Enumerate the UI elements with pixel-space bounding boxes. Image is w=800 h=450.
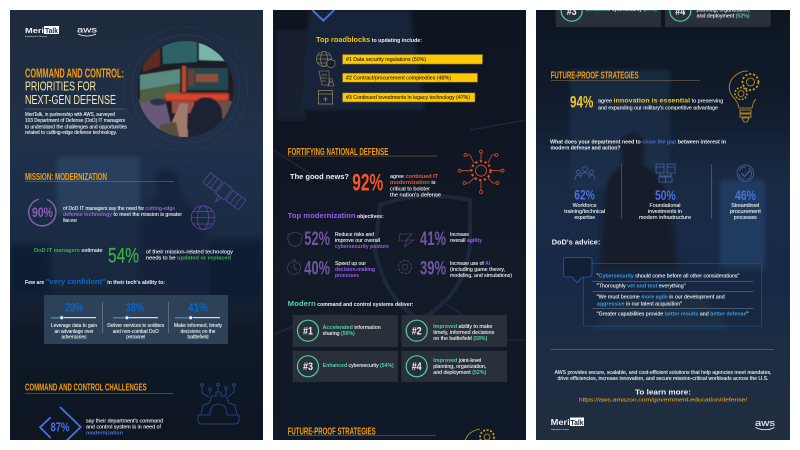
question: close the gap [550, 140, 726, 152]
icon: circuit gear [458, 150, 504, 194]
logo: MeriTalk footer: Meri [551, 418, 570, 427]
text: modernization need [86, 418, 163, 434]
stat: 50% infrastructure: investments in [648, 209, 682, 215]
objective: 52%: Reduce risks and [335, 232, 374, 238]
stat: 28%: adversaries [62, 334, 87, 340]
objective: 41% [398, 232, 482, 248]
objective: 41%: overall agility [450, 238, 482, 244]
objective: 41%: 41% [420, 229, 446, 250]
text: 94% innovation [570, 93, 724, 111]
text: cutting-edge need: than ever [63, 218, 77, 224]
bar: legacy technology [342, 93, 475, 102]
card: #3 continued: Enhanced cybersecurity (54%) [586, 7, 657, 13]
panel: page 2 [273, 10, 526, 444]
text: AWS description: drive efficiencies, increase innovation, and secure mission-critical workloads across the U.S. [558, 376, 768, 382]
text: good news 92%: 92% [352, 170, 383, 197]
card: #3 continued [556, 0, 661, 27]
panel: advice quotes [564, 258, 762, 326]
icon: helmet gear circuit [198, 383, 239, 424]
stat: 28%: an advantage over [54, 329, 94, 335]
stat: 41%: 41% [188, 301, 208, 315]
quotes: "Greater capabilities provide better results and better defense " [597, 312, 749, 318]
card: #4 continued: #4 [675, 6, 686, 18]
stat: 41%: Make informed, timely [174, 323, 222, 329]
icon: globe shield [316, 52, 335, 68]
card: #2: #2 [412, 326, 422, 338]
heading: future-proof strategies: FUTURE-PROOF STRATEGIES [551, 70, 639, 82]
heading: modern command and control: Modern command and control systems deliver: [288, 299, 414, 308]
logo: MeriTalk footer [551, 418, 584, 431]
stat: 50% infrastructure: modern infrastructure [639, 215, 691, 221]
objective: 40%: Speed up our [335, 261, 366, 267]
bar: contract complexities [342, 73, 478, 82]
objective: 40%: decision-making [335, 267, 375, 273]
text: modernization need: modernization [86, 431, 123, 437]
objective: 52% [288, 232, 389, 249]
stat: 38%: Deliver services to soldiers [107, 323, 165, 329]
icon: contract document [319, 71, 334, 86]
icon: speech bubble [564, 258, 592, 282]
intro text: MeriTalk, in partnership with AWS, surveyed [25, 112, 115, 118]
stat: 38%: personnel [126, 334, 145, 340]
text: good news 92%: critical to bolster [390, 186, 430, 192]
objective: 52%: cybersecurity posture [335, 244, 389, 250]
stat diamond: 87%: 87% [50, 420, 70, 435]
text: good news 92% [290, 174, 441, 196]
text: cutting-edge need: of DoD IT managers say the need for cutting-edge [63, 206, 175, 212]
objective: 39%: modeling, and simulations) [450, 273, 512, 279]
title: COMMAND AND CONTROL: [25, 66, 124, 80]
stat: 46% procurement: procurement [730, 209, 761, 215]
stat: 62% workforce: expertise [574, 215, 595, 221]
card: #1 [293, 315, 398, 347]
stat: 28% [51, 303, 97, 338]
stat: 62% workforce: Workforce [573, 203, 597, 209]
call to action: https://aws.amazon.com/government-education/defense/ [579, 397, 748, 403]
text: 54% stat [34, 248, 233, 263]
card: #3 [293, 351, 398, 382]
card: #4 continued: and deployment (52%) [697, 14, 750, 20]
objective: 52%: 52% [304, 229, 330, 250]
icon: light bulb with gears [729, 71, 758, 122]
objective: 52%: improve our overall [335, 238, 380, 244]
objective: 40% [287, 260, 375, 278]
quotes: "Thoroughly vet and test everything" [597, 284, 686, 290]
text: 54% stat: 54% [108, 245, 139, 268]
icon: legacy box [318, 90, 332, 104]
card: #3: Enhanced cybersecurity (54%) [323, 363, 394, 369]
objective: 39% [398, 260, 512, 278]
text: 94% innovation: agree innovation is essential to preserving [598, 97, 724, 104]
stat: 46% procurement: Streamlined [731, 203, 760, 209]
heading: command and control challenges: COMMAND AND CONTROL CHALLENGES [25, 382, 147, 394]
card: #2: on the battlefield (58%) [433, 336, 488, 342]
text: AWS description: AWS provides secure, scalable, and cost-efficient solutions that help agencies meet mandates, [554, 370, 772, 376]
text: good news 92%: agree continued IT [390, 174, 438, 180]
heading: fortifying national defense: FORTIFYING NATIONAL DEFENSE [288, 146, 388, 158]
text: good news 92%: The good news? [290, 172, 349, 181]
logo: MeriTalk [25, 26, 59, 38]
stat: 46% procurement: 46% [735, 187, 756, 203]
bar: data security: #1 Data security regulations (50%) [346, 57, 426, 63]
logo: AWS footer: aws [755, 418, 776, 428]
photo: soldier at command console [137, 40, 236, 140]
stat: 38% [107, 301, 165, 340]
logo: MeriTalk: Meri [25, 26, 44, 35]
quotes: "We must become more agile in our development and [597, 294, 725, 300]
bar: contract complexities: #2 Contract/procurement complexities (48%) [346, 75, 451, 81]
icon: satellite [202, 172, 246, 210]
card: #1: sharing (59%) [323, 331, 355, 337]
card: #4 continued [665, 0, 771, 27]
panel: confidence stats [44, 295, 228, 344]
card: #1: Accelerated information [323, 325, 381, 331]
intro text: 103 Department of Defense (DoD) IT managers [25, 118, 125, 124]
heading: mission modernization: MISSION: MODERNIZATION [25, 171, 107, 183]
logo: AWS footer [755, 418, 776, 430]
heading: DoD's advice: DoD's advice: [552, 238, 600, 247]
icon: globe [191, 206, 215, 230]
stat: 38%: 38% [126, 301, 144, 315]
objective: 40%: 40% [304, 259, 330, 280]
title: PRIORITIES FOR [25, 80, 96, 94]
card: #4: Improved joint-level [433, 358, 481, 364]
stat: 46% procurement: processes [734, 215, 757, 221]
stat ring: 90% [28, 198, 57, 227]
objective: 41%: Increase [450, 232, 469, 238]
stat: 28%: Leverage data to gain [51, 323, 97, 329]
card: #1: #1 [303, 326, 313, 338]
card: #4 continued: planning, organization, [697, 8, 750, 14]
stat diamond: 87% [40, 407, 81, 447]
objective: 39%: 39% [420, 259, 446, 280]
heading: top roadblocks: Top roadblocks to updating include: [316, 37, 422, 44]
text: good news 92%: modernization is [390, 180, 436, 186]
card: #3 continued: #3 [567, 6, 577, 18]
stat: 50% infrastructure: Foundational [650, 203, 680, 209]
stat: 62% workforce [564, 167, 605, 221]
stat: 41%: decisions on the [180, 329, 216, 335]
logo: MeriTalk: Improving the Outcomes [25, 35, 47, 38]
logo: AWS [77, 28, 97, 36]
stat: 62% workforce: training/technical [564, 209, 605, 215]
card: #3: #3 [303, 361, 313, 373]
stat: 28%: 28% [65, 301, 83, 315]
intro text: related to cutting-edge defense technology. [25, 130, 117, 136]
question: close the gap: modern defense and action? [550, 146, 620, 152]
card: #4: and deployment (52%) [433, 370, 487, 376]
logo: MeriTalk: Talk [45, 28, 58, 35]
title [25, 68, 124, 104]
quotes: "Cybersecurity should come before all other considerations" [597, 274, 740, 280]
stat: 50% infrastructure: 50% [655, 187, 676, 203]
icon: light bulb top [465, 429, 494, 444]
bar: legacy technology: #3 Continued investments in legacy technology (47%) [346, 95, 470, 101]
heading: top modernization objectives: Top modernization objectives: [288, 211, 384, 220]
card: #4: planning, organization, [433, 364, 486, 370]
card: #2: Improved ability to make [433, 324, 493, 330]
call to action [579, 388, 748, 403]
text: 94% innovation: and expanding our military's competitive advantage [598, 105, 718, 111]
intro text: to understand the challenges and opportunities [25, 125, 127, 131]
text: cutting-edge need: defense technology to meet the mission is greater [63, 212, 182, 218]
call to action: To learn more: [635, 388, 691, 397]
objective: 40%: processes [335, 273, 359, 279]
title: NEXT-GEN DEFENSE [25, 93, 116, 107]
intro text [25, 112, 127, 136]
objective: 39%: Increase use of AI [450, 261, 491, 267]
heading: future-proof strategies: FUTURE-PROOF STRATEGIES [288, 425, 376, 437]
logo: MeriTalk footer: Improving the Outcomes [551, 428, 569, 431]
stat: 50% infrastructure [639, 164, 691, 221]
card: #2 [401, 315, 507, 347]
stat: 46% procurement [730, 165, 761, 221]
logo: AWS: aws [77, 24, 97, 34]
text: good news 92%: the nation's defense [390, 193, 441, 199]
quotes: aggressive in our talent acquisition" [597, 302, 682, 308]
logo: MeriTalk footer: Talk [570, 420, 584, 427]
text: modernization need: and control system is in need of [86, 425, 162, 431]
question: close the gap: What does your department need to close the gap between interest in [550, 140, 726, 146]
card: #2: timely, informed decisions [433, 330, 495, 336]
text: very confident: Few are "very confident" in their tech's ability to: [25, 277, 165, 286]
text: 94% innovation: 94% [570, 93, 594, 111]
text: modernization need: say their department's command [86, 418, 163, 424]
objective: 39%: (including game theory, [450, 267, 505, 273]
text: AWS description [554, 370, 772, 382]
bar: data security [342, 54, 482, 64]
text: 54% stat: needs to be updated or replaced [146, 256, 231, 262]
card: #4: #4 [412, 361, 422, 373]
stat ring: 90%: 90% [32, 204, 53, 220]
quotes [592, 274, 753, 318]
card: #4 [401, 351, 507, 382]
stat: 62% workforce: 62% [574, 186, 595, 202]
panel: page 3 [536, 0, 790, 440]
stat: 41%: battlefield [188, 334, 209, 340]
stat: 38%: and non-combat DoD [113, 329, 159, 335]
panel: page 1 [10, 10, 263, 447]
text: cutting-edge need [63, 206, 182, 222]
text: 54% stat: DoD IT managers estimate [34, 248, 103, 254]
stat: 41% [174, 303, 222, 338]
chevron: 87% diamond continuation [312, 10, 334, 21]
text: 54% stat: of their mission-related technology [146, 250, 234, 256]
